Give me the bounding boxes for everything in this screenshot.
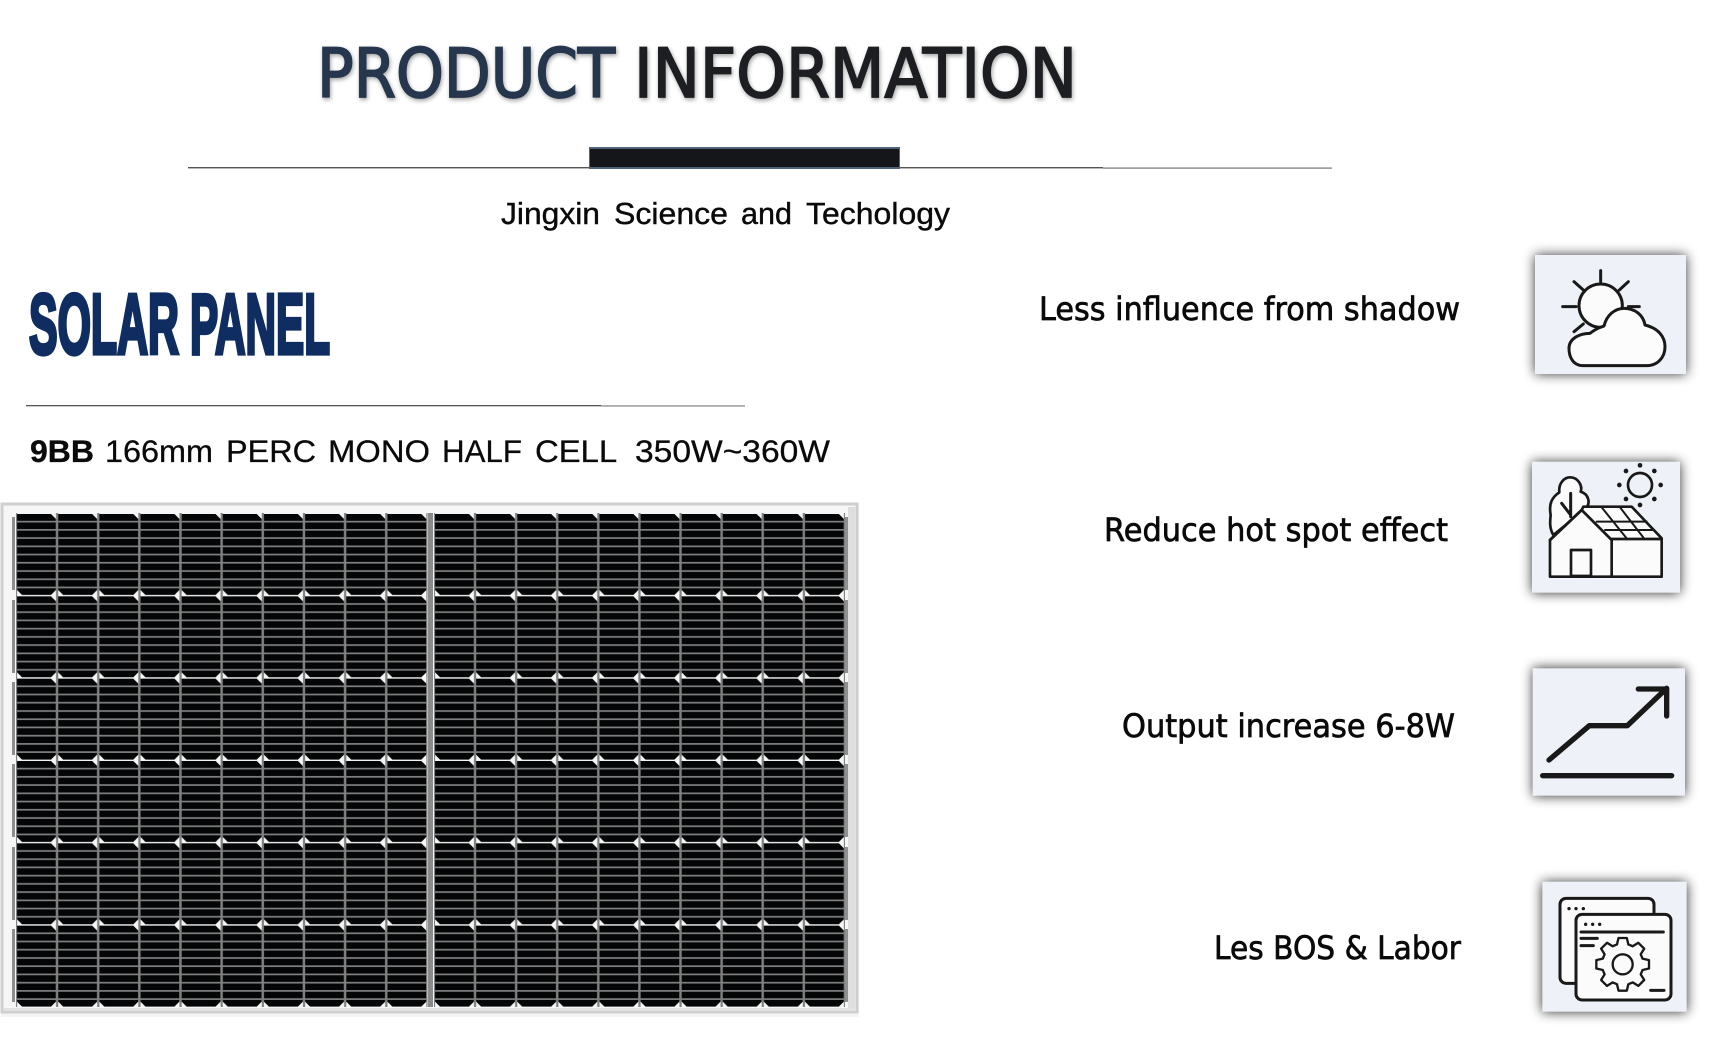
subtitle: Jingxin [501, 196, 600, 231]
subtitle: Techology [806, 196, 951, 231]
title rule with accent bar [188, 147, 1332, 169]
feature: reduce hot spot effect: Reduce hot spot effect [1104, 511, 1448, 549]
product spec line: HALF [442, 433, 522, 469]
subtitle: Science [614, 196, 728, 231]
solar panel image [1, 504, 859, 1017]
subtitle: and [741, 196, 792, 231]
edge busbars [12, 517, 848, 1002]
title [317, 35, 1077, 114]
product spec line: CELL [535, 433, 617, 469]
title: INFORMATION [634, 35, 1077, 114]
product spec line: 9BB [30, 433, 94, 469]
icon: rising line chart arrow [1533, 668, 1685, 796]
heading rule [26, 405, 745, 407]
feature: less influence from shadow: Less influence from shadow [1039, 290, 1460, 328]
text: PANEL [190, 278, 330, 372]
feature: output increase: Output increase 6-8W [1122, 707, 1455, 745]
icon: house with solar roof [1532, 462, 1680, 593]
product spec line: 166mm [105, 433, 213, 469]
title: PRODUCT [317, 35, 615, 114]
product spec line: PERC [226, 433, 316, 469]
icon: browser windows with gear [1542, 882, 1687, 1012]
product spec line: MONO [328, 433, 430, 469]
left cell array [16, 513, 428, 1007]
product spec line: 350W~360W [635, 433, 830, 469]
centre divider [428, 513, 433, 1007]
right cell array [434, 513, 845, 1007]
solar panel heading: SOLAR [29, 278, 179, 372]
panel frame [1, 504, 859, 1017]
feature: less BOS and labor: Les BOS & Labor [1214, 929, 1462, 967]
icon: sun and cloud [1535, 255, 1686, 374]
